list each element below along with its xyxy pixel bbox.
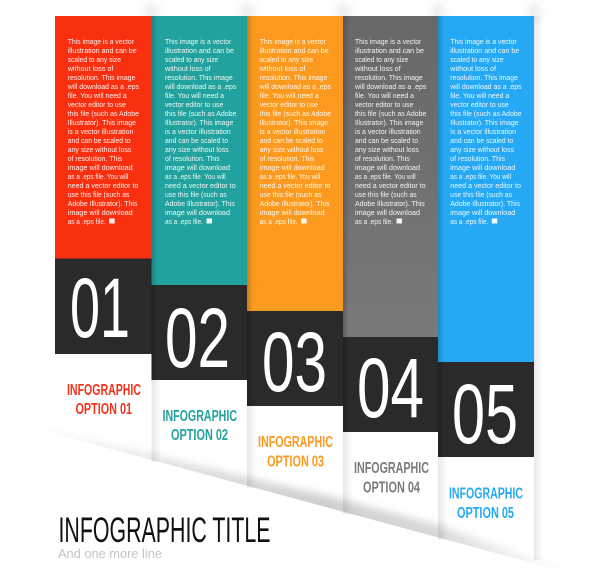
label 04: OPTION 04 [363,480,420,496]
label 01: OPTION 01 [76,401,132,418]
number block 05 [438,362,534,457]
colour band 03 [247,16,343,311]
title: INFOGRAPHIC TITLE [58,511,270,550]
label 03 [258,434,333,470]
label 05 [449,486,523,522]
colour band 05 [438,16,534,362]
panel: option 03 column [247,16,343,470]
panel: option 05 column [438,16,534,522]
number 04: 04 [357,341,424,435]
label 05: OPTION 05 [457,505,514,522]
body text 03 [259,37,331,226]
body text 02 [164,37,236,226]
number 01: 01 [70,261,130,355]
number block 02 [152,285,248,380]
label 04: INFOGRAPHIC [354,460,429,477]
subtitle: And one more line [58,546,162,561]
panel: diagonal floor shadow [82,440,533,563]
number 03: 03 [262,315,327,409]
label 02: OPTION 02 [171,427,228,444]
number block 01 [55,258,152,354]
label 03: OPTION 03 [267,454,324,470]
body text 05 [449,37,522,226]
label 01 [67,382,141,418]
body text 04 [354,37,426,226]
panel: option 02 column [152,16,248,444]
panel: option 04 column [343,16,438,496]
label 05: INFOGRAPHIC [449,486,523,502]
number 05: 05 [452,367,518,461]
colour band 01 [55,16,152,259]
label 01: INFOGRAPHIC [67,382,141,399]
colour band 02 [152,16,248,285]
label 02 [162,408,237,444]
label 02: INFOGRAPHIC [162,408,237,425]
panel: option 01 column [55,16,152,418]
number 02: 02 [165,291,230,385]
number block 04 [343,337,438,432]
colour band 04 [343,16,438,337]
body text 01 [67,37,139,226]
number block 03 [247,311,343,406]
label 04 [354,460,429,496]
label 03: INFOGRAPHIC [258,434,333,451]
